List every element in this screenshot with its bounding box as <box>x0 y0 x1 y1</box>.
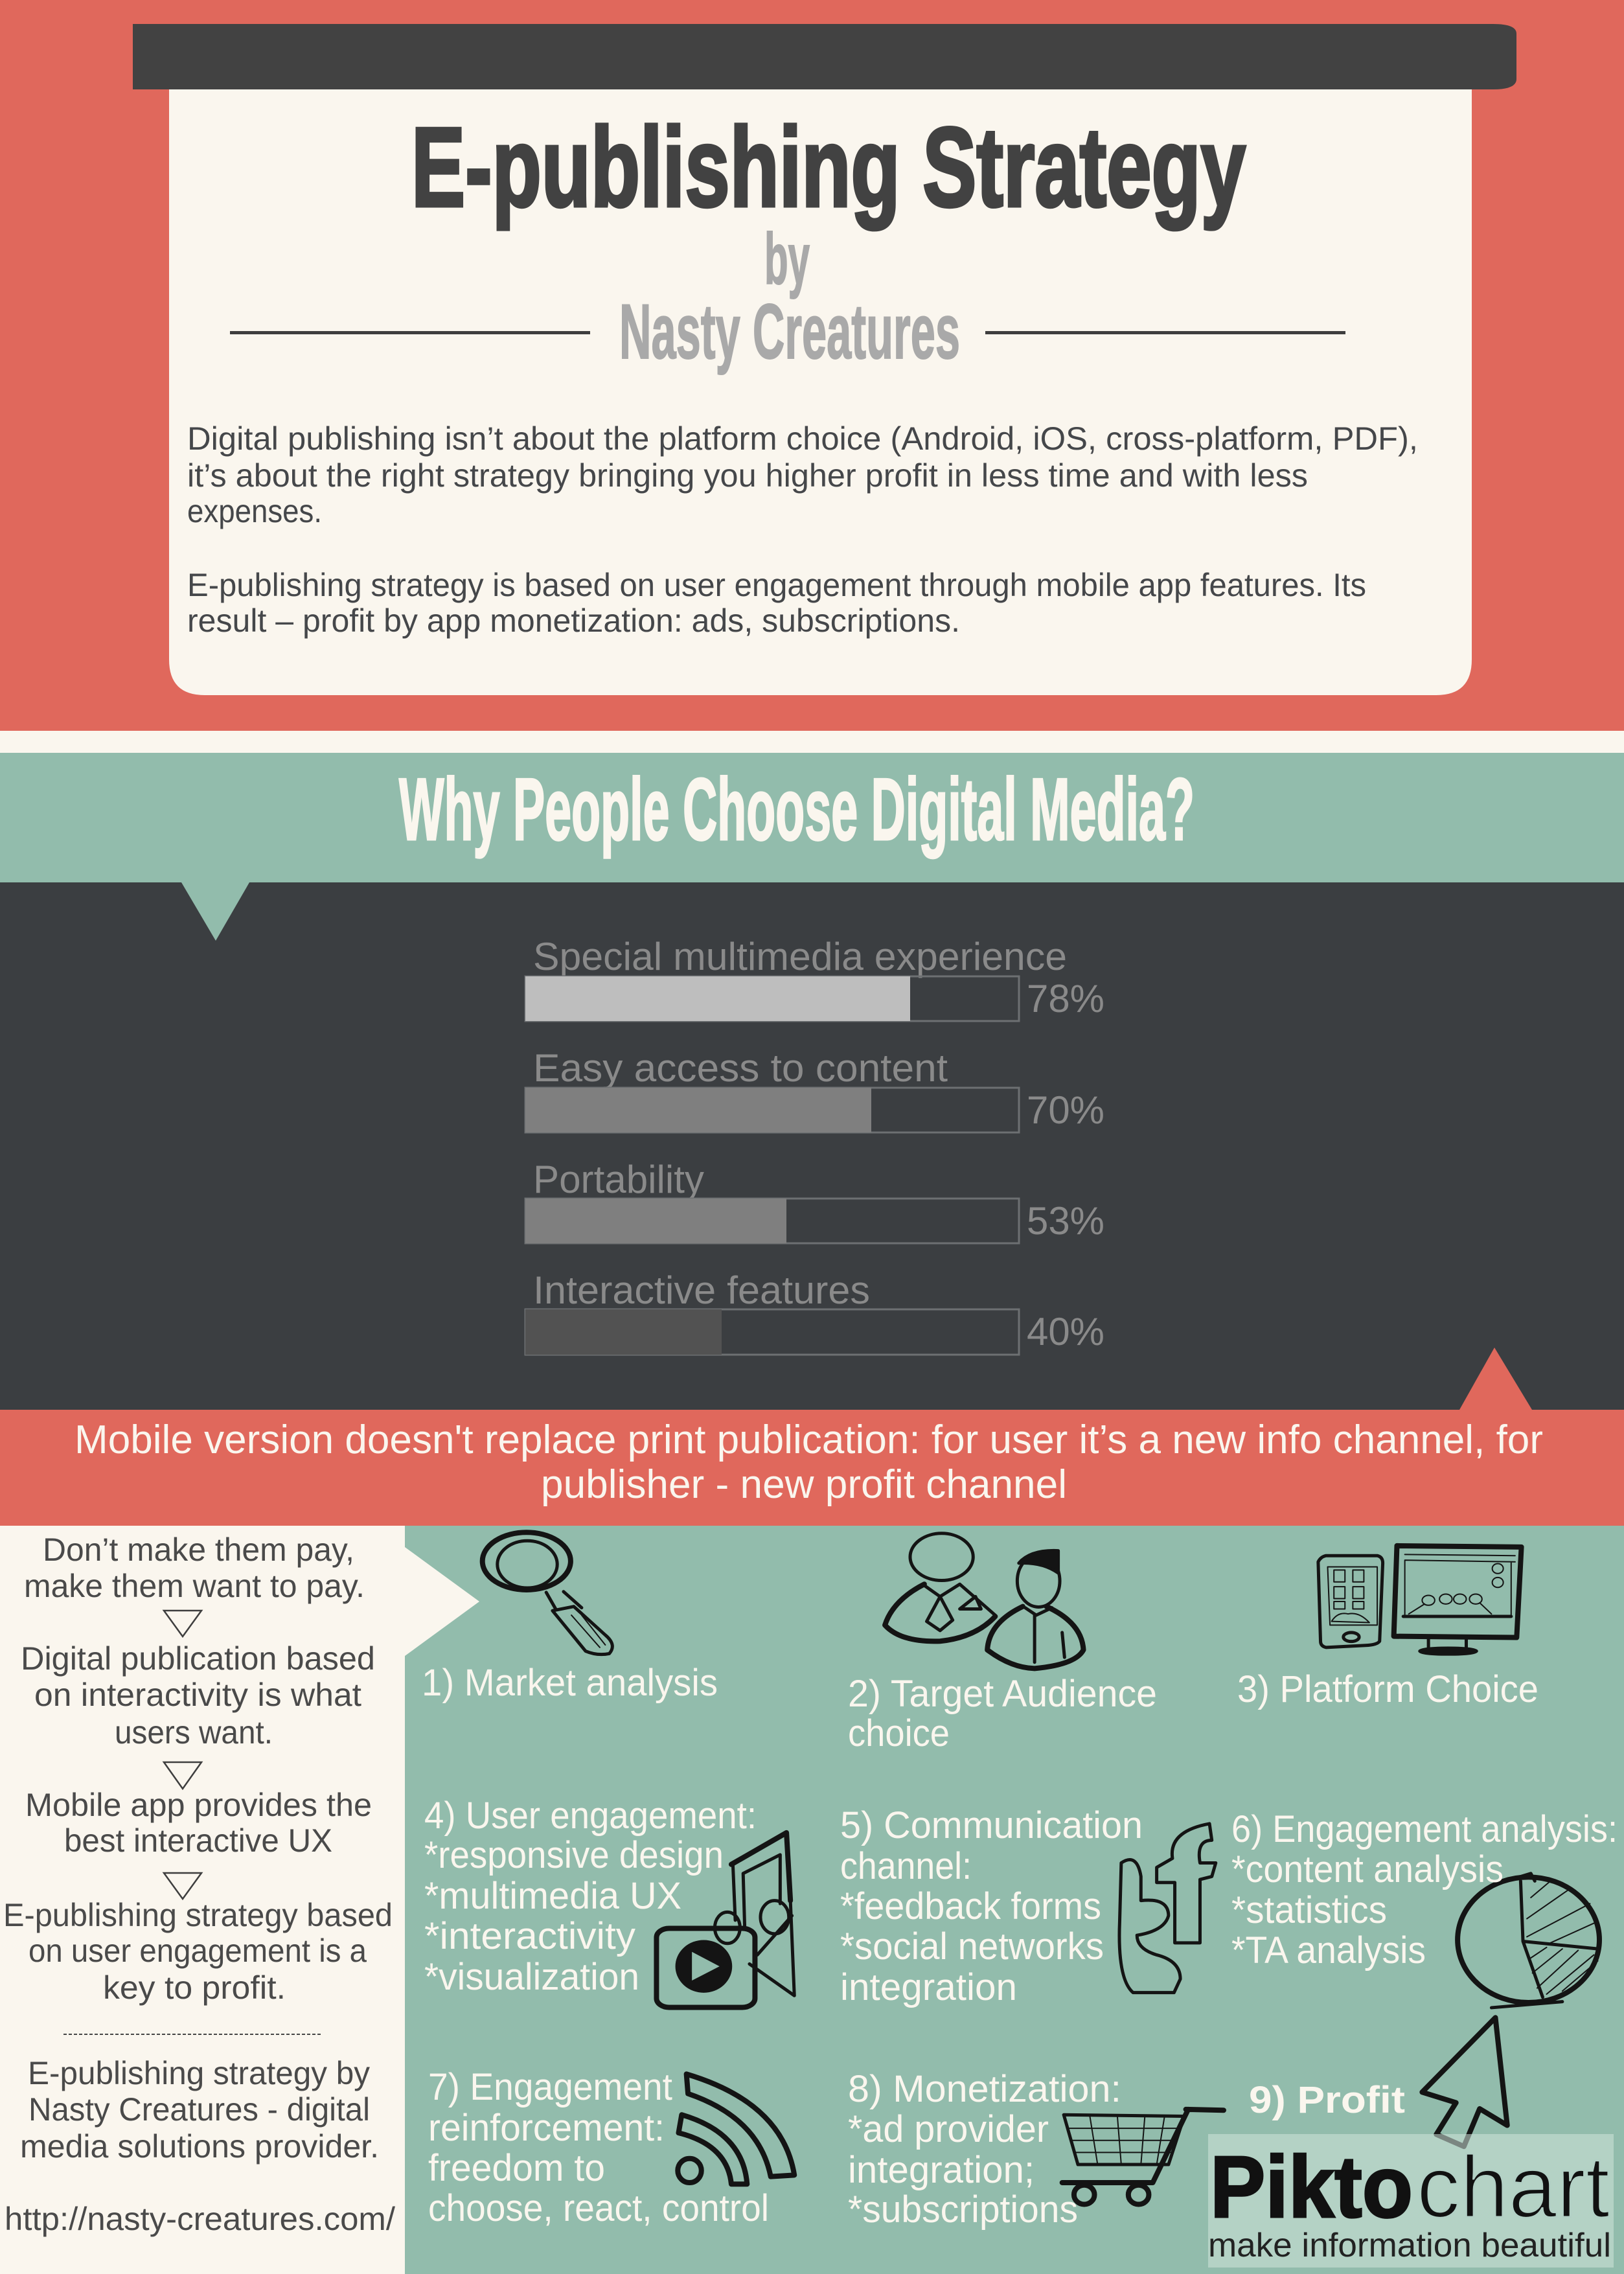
text: company description <box>20 2055 379 2165</box>
step 1 label: 1) Market analysis <box>422 1662 718 1704</box>
icon: two people <box>885 1533 1084 1668</box>
bar: portability: 53% <box>1027 1199 1104 1243</box>
step 8 label: *subscriptions <box>848 2188 1078 2231</box>
step 8 label: *ad provider <box>848 2108 1049 2150</box>
text: don't make them pay: Don’t make them pay, <box>43 1532 354 1568</box>
icon: down triangle 2 <box>164 1762 201 1789</box>
icon: cursor arrow <box>1422 2017 1507 2146</box>
text: company description: E-publishing strategy by <box>28 2055 370 2091</box>
step 5 label: *social networks <box>840 1925 1104 1968</box>
piktochart watermark <box>1208 2134 1614 2268</box>
intro paragraph 2 <box>187 567 1366 639</box>
icon: magnifying glass <box>483 1532 612 1655</box>
chart panel background <box>0 882 1624 1410</box>
icon: rss waves <box>678 2074 794 2184</box>
bar: easy access to content <box>525 1046 1104 1132</box>
section heading banner <box>0 753 1624 941</box>
intro paragraph 1: it’s about the right strategy bringing you higher profit in less time and with less <box>187 457 1308 494</box>
step 4 label <box>424 1795 757 1998</box>
bar: interactive features <box>525 1269 1104 1355</box>
banner pointer <box>181 882 249 941</box>
step 7 label: 7) Engagement <box>428 2066 672 2108</box>
step 7 label: reinforcement: <box>428 2107 665 2149</box>
step 8 label: 8) Monetization: <box>848 2068 1121 2110</box>
step 7 label: freedom to <box>428 2147 605 2189</box>
logo wordmark: Pikto <box>1210 2138 1413 2236</box>
step 2 label <box>848 1673 1157 1754</box>
icon: shopping cart <box>1062 2109 1224 2205</box>
step 5 label <box>840 1804 1143 2008</box>
step 7 label <box>428 2066 769 2229</box>
by: by <box>764 219 810 299</box>
text: digital publication: on interactivity is what <box>34 1677 361 1713</box>
step 5 label: channel: <box>840 1845 972 1887</box>
right rule <box>985 331 1345 334</box>
step 4 label: *responsive design <box>424 1834 724 1876</box>
panel: nine steps <box>405 1526 1624 2274</box>
left rule <box>230 331 590 334</box>
icon: tablet and monitor <box>1318 1546 1522 1654</box>
intro paragraph 1: Digital publishing isn’t about the platform choice (Android, iOS, cross-platform, PDF), <box>187 420 1418 457</box>
step 4 label: *interactivity <box>424 1915 635 1957</box>
bar: interactive features: Interactive features <box>533 1269 870 1312</box>
logo wordmark: chart <box>1417 2138 1610 2236</box>
bar: portability <box>525 1158 1104 1243</box>
step 5 label: *feedback forms <box>840 1885 1101 1927</box>
intro paragraph 1 <box>187 420 1418 529</box>
callout pointer <box>1459 1348 1532 1410</box>
bar: easy access to content: 70% <box>1027 1088 1104 1132</box>
icon: pie chart <box>1458 1874 1599 2008</box>
paper card <box>169 84 1472 695</box>
callout banner: publisher - new profit channel <box>541 1462 1067 1507</box>
text: mobile app: Mobile app provides the <box>25 1787 372 1823</box>
text: e-publishing strategy key: E-publishing strategy based <box>3 1897 393 1933</box>
text: e-publishing strategy key: on user engagement is a <box>29 1933 367 1969</box>
step 6 label: *statistics <box>1231 1889 1387 1931</box>
step 4 label: 4) User engagement: <box>424 1795 757 1837</box>
teal step background <box>405 1526 1624 2274</box>
text: e-publishing strategy key: key to profit. <box>103 1970 286 2006</box>
step 2 label: choice <box>848 1712 950 1754</box>
bar: portability: Portability <box>533 1158 704 1201</box>
icon: social t and f <box>1119 1824 1216 1993</box>
step 9 label: 9) Profit <box>1249 2079 1405 2121</box>
header panel <box>0 0 1624 731</box>
step 7 label: choose, react, control <box>428 2187 769 2229</box>
text: digital publication <box>21 1640 375 1751</box>
logo wordmark <box>1210 2138 1610 2236</box>
callout banner <box>0 1348 1624 1526</box>
step 5 label: integration <box>840 1966 1017 2008</box>
step 6 label: *TA analysis <box>1231 1929 1426 1971</box>
intro paragraph 2: E-publishing strategy is based on user engagement through mobile app features. Its <box>187 567 1366 603</box>
text: don't make them pay: make them want to pay. <box>24 1568 365 1604</box>
step 2 label: 2) Target Audience <box>848 1673 1157 1715</box>
text: mobile app <box>25 1787 372 1859</box>
step labels row 1 <box>422 1662 1538 1754</box>
bar: interactive features: 40% <box>1027 1310 1104 1353</box>
text: digital publication: Digital publication based <box>21 1640 375 1677</box>
text: digital publication: users want. <box>115 1714 273 1751</box>
icon: down triangle 1 <box>164 1611 201 1637</box>
logo tagline: make information beautiful <box>1208 2227 1611 2264</box>
step labels row 3 <box>428 2066 1405 2231</box>
bar: special multimedia experience <box>525 935 1104 1021</box>
callout text: Mobile version doesn't replace print publication: for user it’s a new info channel, for <box>74 1418 1543 1462</box>
step 6 label: *content analysis <box>1231 1848 1504 1890</box>
intro paragraph 1: expenses. <box>187 493 322 529</box>
dark top bar <box>133 24 1516 89</box>
text: url: http://nasty-creatures.com/ <box>5 2201 395 2237</box>
title: E-publishing Strategy <box>411 104 1246 230</box>
step 5 label: 5) Communication <box>840 1804 1143 1846</box>
bar: special multimedia experience: Special multimedia experience <box>533 935 1067 978</box>
step labels row 2 <box>424 1795 1618 2008</box>
text: e-publishing strategy key <box>3 1897 393 2006</box>
bar chart <box>525 935 1104 1355</box>
text: company description: Nasty Creatures - digital <box>29 2091 370 2128</box>
step 8 label <box>848 2068 1121 2231</box>
step 8 label: integration; <box>848 2149 1035 2191</box>
icon: down triangle 3 <box>164 1873 201 1899</box>
bar: easy access to content: Easy access to content <box>533 1046 948 1090</box>
intro paragraph 2: result – profit by app monetization: ads, subscriptions. <box>187 603 960 639</box>
text: mobile app: best interactive UX <box>64 1822 332 1859</box>
panel: left column argument chain <box>3 1532 395 2237</box>
author name: Nasty Creatures <box>619 288 960 375</box>
step 4 label: *multimedia UX <box>424 1875 681 1917</box>
bar: special multimedia experience: 78% <box>1027 977 1104 1020</box>
icon: music note and video camera <box>656 1833 794 2007</box>
text: don't make them pay <box>24 1532 365 1604</box>
step 6 label <box>1231 1808 1618 1971</box>
step 3 label: 3) Platform Choice <box>1237 1668 1538 1710</box>
step 4 label: *visualization <box>424 1956 639 1998</box>
text: company description: media solutions provider. <box>20 2128 379 2165</box>
